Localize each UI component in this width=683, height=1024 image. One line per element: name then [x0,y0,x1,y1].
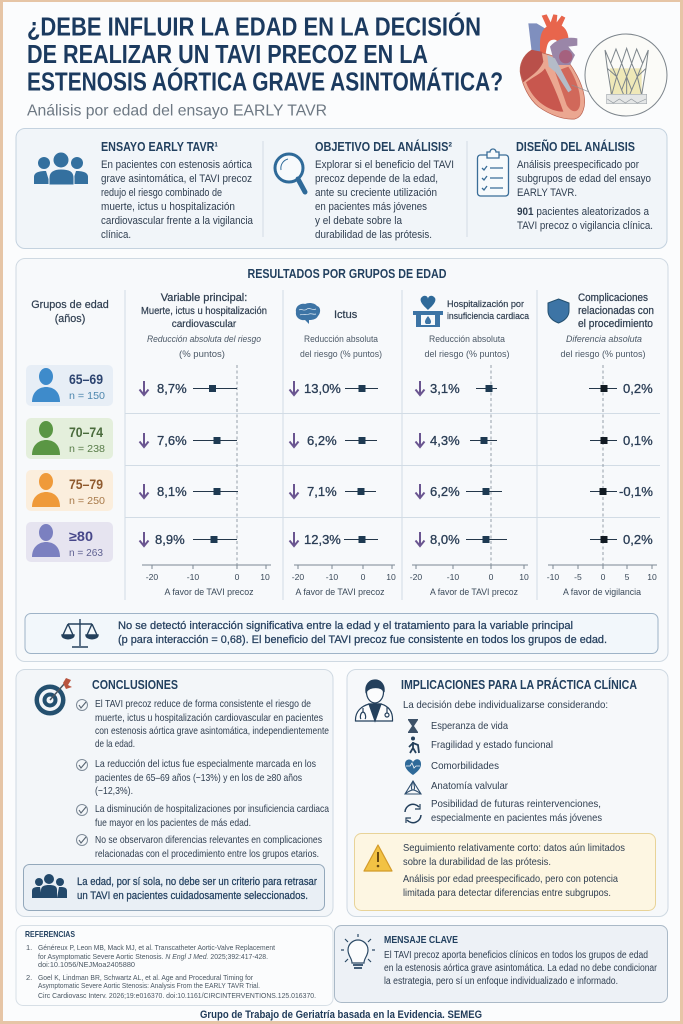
panel: references: 2. [26,973,32,982]
column header: heart failure hospitalization: Hospitalización por [447,299,524,310]
panel: references: doi:10.1056/NEJMoa2405880 [38,960,135,969]
forest plot: primary endpoint: A favor de TAVI precoz [164,587,254,597]
list item: life expectancy: Esperanza de vida [431,721,508,732]
forest plot: heart failure: -10 [447,572,459,582]
forest plot: complications: 0,2% [623,381,653,396]
icon: doctor [355,680,393,721]
forest plot: complications: A favor de vigilancia [563,587,642,597]
icon: magnifying glass [275,154,305,192]
forest plot: stroke: 6,2% [307,433,337,448]
panel: conclusions [16,670,333,916]
text: lead-in: La decisión debe individualizarse considerando: [403,700,608,711]
icon: valve anatomy [405,781,421,794]
text: diseño: subgrupos de edad del ensayo [517,173,651,185]
panel: references: Généreux P, Leon MB, Mack MJ, et al. Transcatheter Aortic-Valve Replacement [38,943,276,952]
conclusion list: La reducción del ictus fue especialmente marcada en los [95,759,316,770]
icon: scales [62,619,98,647]
forest plot: complications: 5 [625,572,630,582]
icon: patients group [34,152,88,185]
forest plot: heart failure: 3,1% [430,381,460,396]
heading: results: RESULTADOS POR GRUPOS DE EDAD [248,267,446,281]
forest plot: complications [547,365,657,597]
icon: clipboard checklist [478,149,508,196]
text: objetivo: ante su creciente utilización [315,187,437,199]
column header: stroke: Reducción absoluta [304,334,379,345]
callout: interaction [25,614,658,654]
warning box: sobre la durabilidad de las prótesis. [403,857,551,868]
title: ¿DEBE INFLUIR LA EDAD EN LA DECISIÓN [27,12,481,42]
forest plot: primary endpoint: 10 [260,572,270,582]
list item: reinterventions: especialmente en pacientes más jóvenes [431,813,602,824]
age card: 70–74 [26,418,113,459]
icon: target [34,678,72,716]
footer: Grupo de Trabajo de Geriatría basada en la Evidencia. SEMEG [200,1009,482,1021]
text: ensayo: clínica. [101,229,131,241]
text: ensayo: grave asintomática, el TAVI precoz [101,173,252,185]
callout: age not a criterion: La edad, por sí sola, no debe ser un criterio para retrasar [77,876,317,888]
icon: cycle arrows [405,804,421,823]
panel: intro [16,128,667,248]
column header: heart failure hospitalization [413,296,530,360]
text: objetivo: OBJETIVO DEL ANÁLISIS² [315,139,452,154]
column header: stroke: del riesgo (% puntos) [300,349,382,360]
text: ensayo: En pacientes con estenosis aórtica [101,159,252,171]
icon: hospital with heart [413,296,443,327]
forest plot: primary endpoint [140,365,271,597]
column header: age groups [31,299,109,325]
column header: procedure complications: Diferencia absoluta [566,334,642,345]
column header: primary endpoint [141,292,267,360]
forest plot: heart failure: 4,3% [430,433,460,448]
age card: ≥80: ≥80 [69,529,93,544]
age card: ≥80 [26,522,113,562]
conclusion list: La disminución de hospitalizaciones por insuficiencia cardiaca [95,804,329,815]
panel: references: REFERENCIAS [25,929,75,939]
forest plot: primary endpoint: 7,6% [157,433,187,448]
conclusion list: de la edad. [95,739,135,750]
forest plot: stroke: A favor de TAVI precoz [296,587,385,597]
panel: key message [334,926,668,1002]
warning box: Seguimiento relativamente corto: datos aún limitados [403,843,625,854]
column header: stroke [296,303,382,360]
forest plot: heart failure [410,365,529,597]
illustration: TAVI valve [585,34,667,116]
column header: heart failure hospitalization: del riesgo (% puntos) [424,349,510,360]
text: diseño: DISEÑO DEL ANÁLISIS [516,139,635,154]
forest plot: stroke: 0 [361,572,366,582]
conclusion list: fue mayor en los pacientes de más edad. [95,818,251,829]
forest plot: complications: -10 [547,572,559,582]
text: objetivo: precoz depende de la edad, [315,173,438,185]
conclusion list: pacientes de 65–69 años (−13%) y en los de ≥80 años [95,773,302,784]
age card: 75–79: n = 250 [69,496,105,507]
warning box [354,834,656,910]
forest plot: stroke: 12,3% [304,532,341,547]
list item: valve anatomy: Anatomía valvular [431,781,509,792]
panel: references: 1. [26,943,32,952]
title: ESTENOSIS AÓRTICA GRAVE ASINTOMÁTICA? [27,66,503,96]
forest plot: stroke: -10 [326,572,338,582]
column header: heart failure hospitalization: Reducción absoluta [429,334,506,345]
forest plot: primary endpoint: -20 [146,572,158,582]
panel: references: Circ Cardiovasc Interv. 2026;19:e016370. doi:10.1161/CIRCINTERVENTIONS.125.016370. [38,991,316,1000]
forest plot: stroke: 13,0% [304,381,341,396]
conclusion list: (−12,3%). [95,786,133,797]
panel: references: for Asymptomatic Severe Aortic Stenosis. N Engl J Med. 2025;392:417-428. [38,952,268,961]
panel: results [16,258,668,662]
conclusion list: con estenosis aórtica grave asintomática, independientemente [95,726,329,737]
icon: shield [548,299,569,323]
column header: procedure complications: Complicaciones [578,292,648,304]
age card: 70–74: 70–74 [69,425,103,440]
column header: procedure complications: el procedimiento [578,318,653,330]
forest plot: complications: 0 [601,572,606,582]
column header: procedure complications [548,292,654,360]
column header: age groups: Grupos de edad [31,299,109,311]
icon: light bulb [341,934,375,968]
callout: age not a criterion [24,864,324,910]
text: objetivo: durabilidad de las prótesis. [315,229,432,241]
panel: references: Asymptomatic Severe Aortic Stenosis: Analysis From the EARLY TAVR Trial. [38,981,260,990]
icon: warning triangle [364,845,392,871]
column header: heart failure hospitalization: insuficiencia cardiaca [447,311,530,322]
age card: ≥80: n = 263 [69,548,103,559]
callout: age not a criterion: un TAVI en pacientes cuidadosamente seleccionados. [77,890,308,902]
forest plot: heart failure: 6,2% [430,484,460,499]
illustration: heart [520,14,597,119]
conclusion list: muerte, ictus u hospitalización cardiovascular en pacientes [95,713,323,724]
text: ensayo: ENSAYO EARLY TAVR¹ [101,140,218,154]
forest plot: stroke [290,381,396,597]
text: diseño: TAVI precoz o vigilancia clínica. [517,220,653,232]
age card: 65–69: 65–69 [69,372,103,387]
list item: reinterventions [431,799,602,824]
column header: primary endpoint: (% puntos) [179,349,225,360]
text: ensayo [101,140,253,241]
text: objetivo: en pacientes más jóvenes [315,201,428,213]
forest plot: stroke: 10 [386,572,396,582]
icon: walker [409,736,419,753]
column header: procedure complications: relacionadas con [578,305,654,317]
age card: 65–69: n = 150 [69,391,105,402]
forest plot: heart failure: 0 [489,572,494,582]
text: ensayo: redujo el riesgo combinado de [101,187,222,199]
list item: reinterventions: Posibilidad de futuras reintervenciones, [431,799,601,810]
warning box: Análisis por edad preespecificado, pero con potencia [403,874,618,885]
title: DE REALIZAR UN TAVI PRECOZ EN LA [27,39,428,69]
title [27,12,503,96]
forest plot: complications: -0,1% [619,484,653,499]
text: ensayo: muerte, ictus u hospitalización [101,201,235,213]
age card: 65–69 [26,365,113,406]
column header: procedure complications: del riesgo (% puntos) [560,349,646,360]
column header: primary endpoint: cardiovascular [172,319,237,330]
panel: key message: El TAVI precoz aporta beneficios clínicos en todos los grupos de edad [384,950,648,961]
text: diseño: Análisis preespecificado por [517,159,639,171]
conclusion list: El TAVI precoz reduce de forma consistente el riesgo de [95,699,311,710]
forest plot: primary endpoint: 0 [235,572,240,582]
forest plot: stroke: -20 [292,572,304,582]
column header: stroke: Ictus [334,309,358,321]
column header: primary endpoint: Muerte, ictus u hospitalización [141,306,267,317]
forest plot: stroke: 7,1% [307,484,337,499]
conclusion list: No se observaron diferencias relevantes en complicaciones [95,835,322,846]
text: objetivo [315,139,454,241]
icon: hourglass [408,719,418,733]
forest plot: heart failure: A favor de TAVI precoz [430,587,518,597]
panel: key message: la estrategia, pero sí un enfoque individualizado e informado. [384,976,618,987]
subtitle: Análisis por edad del ensayo EARLY TAVR [27,102,327,120]
panel: clinical implications [347,670,668,916]
icon: heart with pulse [405,759,421,775]
forest plot: primary endpoint: 8,1% [157,484,187,499]
age card: 70–74: n = 238 [69,444,105,455]
panel: references: Goel K, Lindman BR, Schwartz AL, et al. Age and Procedural Timing for [38,973,253,982]
list item: frailty: Fragilidad y estado funcional [431,740,553,751]
panel: references [16,926,333,1006]
forest plot: complications: 0,2% [623,532,653,547]
icon: brain [296,303,320,324]
text: diseño: EARLY TAVR. [517,187,577,199]
column header: age groups: (años) [55,313,85,325]
age card: 75–79: 75–79 [69,477,103,492]
text: diseño [516,139,653,232]
column header: primary endpoint: Reducción absoluta del riesgo [147,334,261,345]
callout: interaction: (p para interacción = 0,68). El beneficio del TAVI precoz fue consistente en todos los grupos de edad. [118,634,607,646]
conclusion list: relacionadas con el procedimiento entre los grupos etarios. [95,849,319,860]
age card: 75–79 [26,470,113,511]
forest plot: complications: 10 [647,572,657,582]
text: diseño: 901 pacientes aleatorizados a [517,206,649,218]
forest plot: complications: -5 [574,572,582,582]
warning box: limitada para detectar diferencias entre subgrupos. [403,888,611,899]
forest plot: primary endpoint: 8,9% [155,532,185,547]
text: objetivo: Explorar si el beneficio del TAVI [315,159,454,171]
text: objetivo: y el debate sobre la [315,215,402,227]
callout: interaction: No se detectó interacción significativa entre la edad y el tratamiento para la variable principal [118,620,573,632]
forest plot: heart failure: 8,0% [430,532,460,547]
text: ensayo: cardiovascular frente a la vigilancia [101,215,253,227]
forest plot: primary endpoint: 8,7% [157,381,187,396]
heading: conclusions: CONCLUSIONES [92,678,178,692]
forest plot: heart failure: 10 [519,572,529,582]
conclusion list [76,699,329,860]
column header: primary endpoint: Variable principal: [161,292,247,304]
heading: implications: IMPLICACIONES PARA LA PRÁCTICA CLÍNICA [401,677,637,692]
icon: people [32,874,67,898]
list item: comorbidities: Comorbilidades [431,761,499,772]
forest plot: primary endpoint: -10 [187,572,199,582]
forest plot: heart failure: -20 [410,572,422,582]
panel: key message: MENSAJE CLAVE [384,935,458,946]
forest plot: complications: 0,1% [623,433,653,448]
